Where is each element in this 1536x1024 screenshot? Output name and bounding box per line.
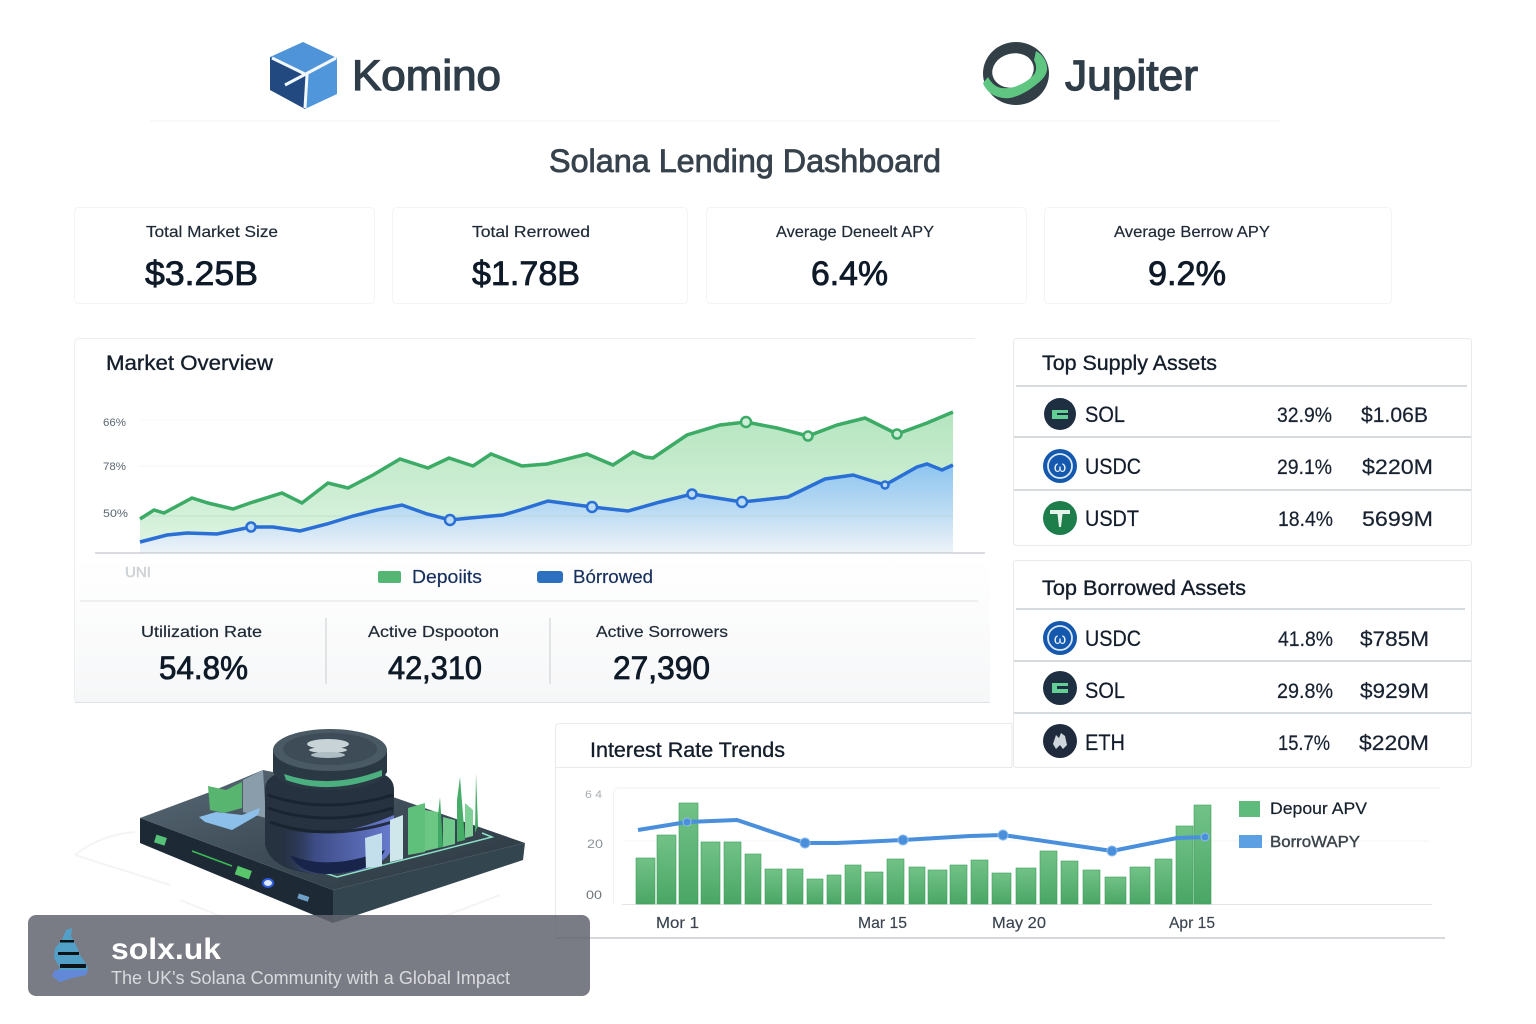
icon: USDC [1043,621,1077,655]
legend: borrow APY: BorroWAPY [1270,834,1360,851]
stat: active borrowers: Active Sorrowers [596,624,728,641]
row: SOL [1044,398,1428,430]
y axis labels: 78% [103,461,126,473]
panel: interest rate trends [556,724,1445,938]
y axis labels: 20 [587,837,603,851]
panel: top borrowed assets [1014,560,1472,768]
value: 6.4% [811,255,888,293]
row: USDT [1043,501,1433,535]
label: Total Market Size [146,224,278,241]
borrowed markers [246,482,888,532]
icon: ETH [1043,724,1077,758]
y axis labels: 50% [103,508,128,520]
y axis labels: 66% [103,417,126,429]
icon: Jupiter ring [983,42,1049,105]
x axis labels: May 20 [992,915,1046,932]
row: USDT: 18.4% [1278,508,1333,531]
x axis labels: Mor 1 [656,915,699,932]
wordmark: Komino: Komino [352,52,501,100]
x axis labels: Apr 15 [1169,915,1215,932]
row: SOL: SOL [1085,678,1125,703]
row: USDC [1043,621,1429,655]
line: borrow APY [638,820,1208,851]
stat: utilization rate: 54.8% [159,650,248,686]
deposits area [140,412,953,553]
legend: deposit APY: Depour APV [1270,799,1368,818]
row: ETH [1043,724,1429,758]
banner: solx.uk [28,915,590,996]
x axis labels: Mar 15 [858,915,907,932]
icon: SOL [1044,398,1076,430]
KPI card: average borrow APY [1044,208,1392,304]
heading: Top Supply Assets [1042,352,1217,375]
row: SOL [1043,671,1429,705]
label: Total Rerrowed [472,224,590,241]
y axis labels: 6 4 [585,789,602,801]
row: ETH: ETH [1085,730,1125,755]
heading: Interest Rate Trends [590,739,785,762]
row: USDC [1043,449,1433,483]
stat: active depositors: 42,310 [388,650,482,686]
bars beside stack [365,773,478,868]
faded x axis label: UNI [125,564,151,581]
row: ETH: 15.7% [1278,732,1330,755]
stat: utilization rate: Utilization Rate [141,624,262,641]
row: SOL: $929M [1360,680,1429,703]
panel: top supply assets [1014,338,1472,546]
stat: active borrowers: 27,390 [613,650,710,686]
icon: SOL [1043,671,1077,705]
legend: deposits: Depoiits [412,567,482,587]
row: USDT: USDT [1085,506,1139,531]
row: USDC: USDC [1085,626,1141,651]
row: USDC: 41.8% [1278,628,1333,651]
deposits markers [741,417,902,440]
legend: deposits [378,567,482,587]
line markers [683,818,1209,856]
tagline: The UK's Solana Community with a Global Impact [111,968,510,988]
icon: USDC: ω [1054,459,1066,476]
combo chart [585,788,1440,932]
front LEDs [154,835,309,902]
heading: Top Borrowed Assets [1042,577,1246,600]
row: USDC: USDC [1085,454,1141,479]
y axis labels: 00 [586,888,602,902]
value: $3.25B [145,255,258,293]
coin stack [265,729,394,874]
icon: UK map [52,928,88,982]
value: 9.2% [1148,255,1226,293]
icon: USDC: ω [1054,631,1066,648]
icon: USDT [1043,501,1077,535]
title: Solana Lending Dashboard [549,143,941,179]
x axis labels [656,915,1215,932]
brand name: solx.uk [111,933,221,966]
area chart [95,412,985,581]
row: SOL: $1.06B [1361,404,1428,427]
row: USDC: $785M [1360,628,1429,651]
label: Average Berrow APY [1114,224,1270,241]
row: USDT: 5699M [1362,508,1433,531]
row: SOL: 32.9% [1277,404,1332,427]
heading: Market Overview [106,352,274,375]
row: USDC: 29.1% [1277,456,1332,479]
illustration: isometric lending platform [75,729,525,960]
y axis labels [585,789,603,902]
row: USDC: $220M [1362,456,1433,479]
row: SOL: SOL [1085,402,1125,427]
ground shadow [75,832,500,960]
KPI card: total market size [74,208,374,304]
panel: market overview [74,338,990,702]
logo: Komino [270,42,501,109]
wordmark: Jupiter: Jupiter [1065,52,1198,100]
stat: active depositors [368,624,499,686]
y axis labels [103,417,128,520]
borrowed area [140,464,953,553]
logo: Jupiter [983,42,1198,105]
borrowed line [140,464,953,542]
KPI card: total borrowed [392,208,688,304]
icon: USDC [1043,449,1077,483]
stat: active depositors: Active Dspooton [368,624,499,641]
label: Average Deneelt APY [776,224,934,241]
KPI card: average deposit APY [706,208,1026,304]
deposits line [140,412,953,519]
small tray and chart [199,782,260,830]
platform base [140,770,525,923]
stat: utilization rate [141,624,262,686]
row: ETH: $220M [1359,732,1429,755]
icon: Komino cube [270,42,337,109]
legend: borrowed: Bórrowed [573,567,653,587]
legend: borrowed [537,567,653,587]
stat: active borrowers [596,624,728,686]
row: SOL: 29.8% [1277,680,1333,703]
value: $1.78B [472,255,580,293]
bars: deposit APY [636,803,1211,904]
